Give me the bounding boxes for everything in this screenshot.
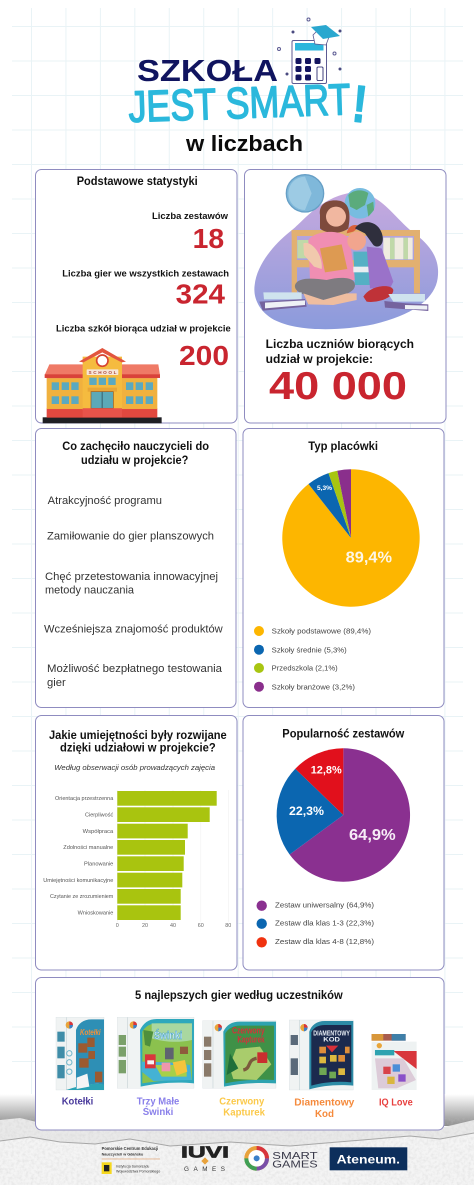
stat label: games: Liczba gier we wszystkich zestawach [62,269,229,279]
logo: Pomorskie Centrum Edukacji Nauczycieli: Nauczycieli w Gdańsku [102,1151,144,1156]
logo: Pomorskie Centrum Edukacji Nauczycieli: Województwa Pomorskiego [116,1169,160,1173]
big number: 40 000: 40 000 [269,365,407,408]
panel: basic statistics [36,170,237,423]
legend: set popularity [256,900,374,948]
legend: set popularity: Zestaw dla klas 1-3 (22,3%) [275,918,374,927]
title line: JEST SMART!: ! [350,75,370,134]
panel: number of students [244,170,446,423]
bar chart: skills: Cierpliwość [85,812,114,818]
logo: Pomorskie Centrum Edukacji Nauczycieli: Pomorskie Centrum Edukacji [102,1146,158,1151]
subtitle: w liczbach: w liczbach [185,131,303,156]
label: number of students: udział w projekcie: [266,352,373,366]
list of reasons: Zamiłowanie do gier planszowych [47,530,214,542]
heading: skills question: dzięki udziałowi w projekcie? [60,743,216,755]
heading: Podstawowe statystyki: Podstawowe statystyki [77,176,198,188]
heading: Popularność zestawów: Popularność zestawów [282,728,404,740]
list of reasons: Wcześniejsza znajomość produktów [44,624,223,636]
stat label: sets: Liczba zestawów [152,211,229,221]
logo: Smart Games: GAMES [272,1159,318,1170]
pie chart: institution type: 5,3% [317,486,333,492]
game name: Diamentowy Kod: Diamentowy [294,1098,355,1109]
bar chart: skills: Umiejętności komunikacyjne [43,878,113,884]
legend: institution type [254,626,371,692]
pie chart: set popularity: 12,8% [311,765,342,777]
logo: Szkoła jest SMART [128,18,370,134]
legend: institution type: Szkoły średnie (5,3%) [272,645,347,654]
subheading: according to teachers: Według obserwacji osób prowadzących zajęcia [54,763,215,772]
panel: institution type [243,428,444,708]
stat value: 200: 200 [179,340,229,371]
panel: top five games [36,978,444,1130]
game box: Czerwony Kapturek: Kapturek [237,1035,265,1045]
legend: set popularity: Zestaw dla klas 4-8 (12,8%) [275,937,374,946]
bar chart: skills: 20 [142,923,148,929]
bar chart: skills: 40 [170,923,176,929]
game name: Trzy Małe Świnki [137,1096,180,1118]
logo: Smart Games [246,1148,319,1170]
decorative dots around calculator [278,18,342,76]
illustration: teacher reading with children [254,175,438,329]
pie chart: set popularity: 22,3% [289,804,324,818]
list of reasons: metody nauczania [45,584,135,596]
game name: Trzy Małe Świnki: Świnki [143,1105,174,1118]
logo: IUVI Games: IUVI [181,1145,229,1162]
legend: institution type: Przedszkola (2,1%) [272,664,338,673]
logo: Pomorskie Centrum Edukacji Nauczycieli: Instytucja Samorządu [116,1164,149,1168]
game name: Kotełki: Kotełki [62,1096,94,1107]
legend: institution type: Szkoły podstawowe (89,4%) [272,627,371,636]
title line: JEST SMART!: JEST SMART [128,75,351,132]
bar chart: skills: 80 [225,923,231,929]
heading: motivation question [62,441,209,467]
game box: Diamentowy Kod: DIAMENTOWY [313,1028,350,1037]
heading: skills question [49,730,227,755]
heading: top five games: 5 najlepszych gier według uczestników [135,990,343,1002]
game box: Diamentowy Kod [289,1020,353,1090]
stat value: 324: 324 [176,278,225,310]
pie chart: set popularity [277,748,410,882]
bar chart: skills: Czytanie ze zrozumieniem [50,894,114,900]
icon: calculator [292,40,326,84]
game name: Trzy Małe Świnki: Trzy Małe [137,1096,180,1107]
logo: Ateneum [330,1147,407,1170]
label: number of students: Liczba uczniów biorących [266,337,414,351]
logo: Smart Games: SMART [272,1151,319,1162]
game boxes [56,1017,417,1090]
heading: skills question: Jakie umiejętności były rozwijane [49,730,227,742]
pie chart: institution type [282,469,420,607]
game box: Trzy Małe Świnki: Świnki [154,1029,182,1042]
game name: Czerwony Kapturek: Czerwony [219,1096,265,1107]
bar chart: skills: Orientacja przestrzenna [55,796,113,802]
heading: Typ placówki: Typ placówki [308,441,378,453]
panel: teachers' motivation [36,428,236,708]
logo: IUVI Games: GAMES [184,1166,225,1173]
game name: IQ Love: IQ Love [379,1098,413,1109]
game name: Diamentowy Kod: Kod [315,1109,334,1120]
game box: Diamentowy Kod: KOD [323,1036,340,1043]
bar chart: skills: Współpraca [83,829,113,835]
heading: motivation question: Co zachęciło nauczycieli do [62,441,209,453]
logo: Pomorskie Centrum Edukacji Nauczycieli [102,1146,160,1174]
game box: Czerwony Kapturek [203,1021,276,1088]
legend: set popularity: Zestaw uniwersalny (64,9%) [275,901,374,910]
legend: institution type: Szkoły branżowe (3,2%) [272,682,355,691]
stat label: schools: Liczba szkół biorąca udział w projekcie [56,324,231,334]
list of reasons: Atrakcyjność programu [48,495,162,507]
icon: graduation cap [311,25,340,45]
icon: school building: SCHOOL [88,370,117,375]
bar chart: skills: Zdolności manualne [63,845,113,851]
game box: Kotełki: Kotełki [80,1027,101,1037]
list of reasons: Możliwość bezpłatnego testowania [47,663,223,675]
footer logos [102,1145,407,1174]
bar chart: skills: 60 [198,923,204,929]
logo: Ateneum: Ateneum. [337,1152,400,1166]
title line: SZKOŁA: SZKOŁA [137,53,278,88]
game name: Czerwony Kapturek: Kapturek [223,1108,265,1119]
list of reasons [44,495,223,689]
stat value: 18: 18 [193,223,224,254]
heading: motivation question: udziału w projekcie? [81,455,188,467]
panel: skills developed [36,716,237,970]
logo: IUVI Games [181,1145,229,1173]
pie chart: institution type: 89,4% [346,550,392,567]
bar chart: skills: Planowanie [84,862,113,868]
bar chart: skills [43,790,231,929]
game box: Trzy Małe Świnki [117,1017,194,1088]
panel: set popularity [243,716,444,970]
bar chart: skills: Wnioskowanie [78,910,113,916]
list of reasons: Chęć przetestowania innowacyjnej [45,571,218,583]
torn paper footer background [0,1118,474,1185]
bar chart: skills: 0 [116,923,119,929]
icon: school building [43,348,162,423]
game box: Kotełki [56,1017,104,1090]
game name: Diamentowy Kod [294,1098,355,1120]
game name: Czerwony Kapturek [219,1096,265,1119]
game box: IQ Love [372,1034,417,1090]
list of reasons: gier [47,677,66,689]
pie chart: set popularity: 64,9% [349,827,396,844]
game box: Czerwony Kapturek: Czerwony [232,1025,265,1035]
label: number of students [266,337,414,366]
